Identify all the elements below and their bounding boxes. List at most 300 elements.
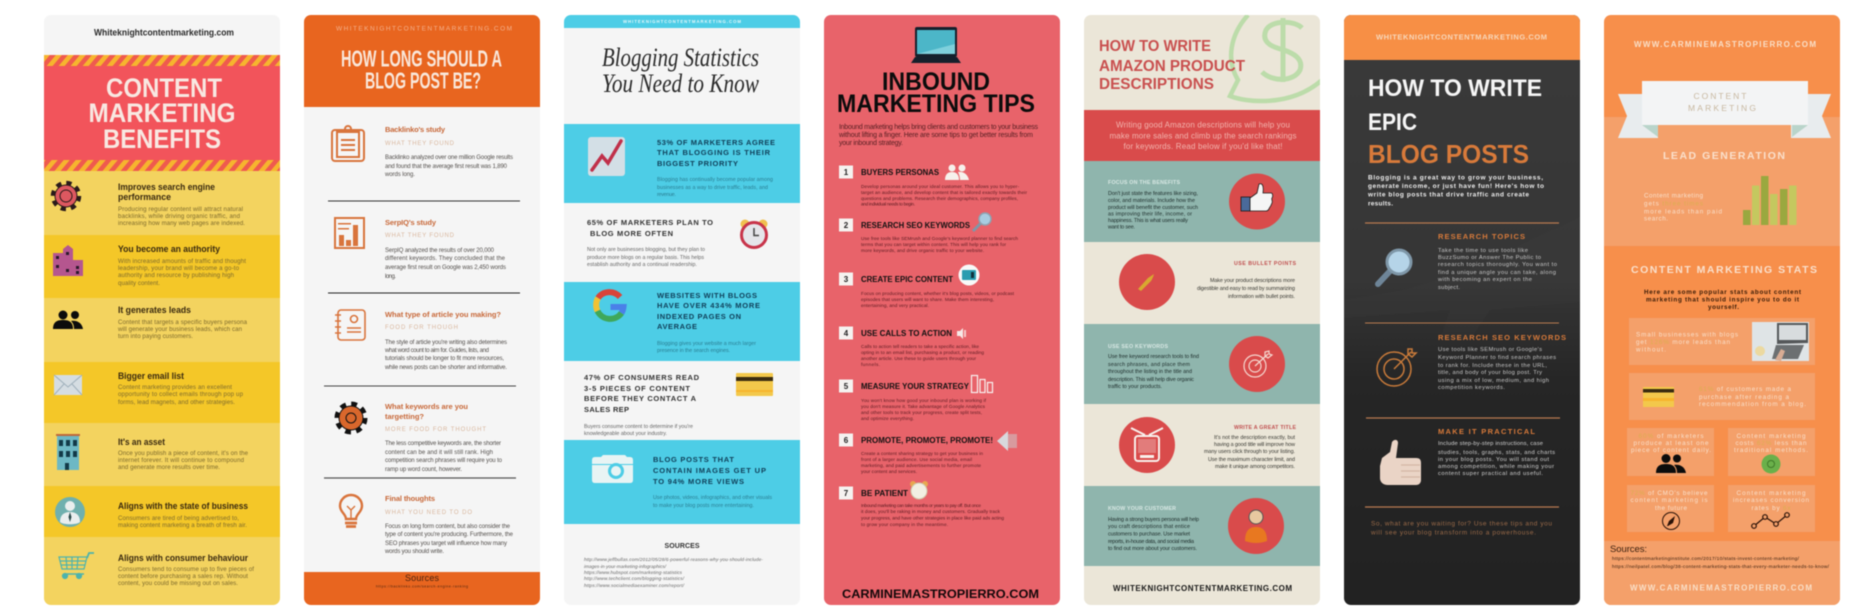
item: authority: quality content. bbox=[118, 280, 160, 287]
icon: bar chart bbox=[335, 218, 364, 248]
stat box: 60%: piece of content daily. bbox=[1631, 447, 1711, 454]
lead generation text: search. bbox=[1644, 216, 1668, 222]
section: bullet points: information with bullet points. bbox=[1228, 294, 1295, 300]
tip 5: and other tools to track your progress, create split tests, bbox=[861, 410, 982, 415]
section: research SEO keywords bbox=[1377, 333, 1566, 391]
intro bbox=[1367, 174, 1544, 208]
intro: without lifting a finger. Here are some tips to get better results from bbox=[838, 132, 1033, 139]
intro: Blogging is a great way to grow your business, bbox=[1368, 174, 1543, 182]
stat box: 126%: get 126% more leads than bbox=[1636, 339, 1730, 346]
stat: 47%: 3-5 PIECES OF CONTENT bbox=[584, 384, 690, 393]
intro: for keywords. Read below if you'd like that! bbox=[1124, 142, 1282, 151]
icon: megaphone bbox=[997, 431, 1017, 451]
icon: people bbox=[1656, 454, 1686, 473]
stat box: 61%: purchase after reading a bbox=[1699, 394, 1789, 401]
item: search performance: increasing how many web pages are indexed. bbox=[118, 220, 245, 227]
stat box: 126%: without. bbox=[1635, 346, 1666, 354]
item: state of business bbox=[55, 497, 248, 529]
study: Backlinko: Backlinko analyzed over one million Google results bbox=[385, 155, 513, 161]
study: SerpIQ: long. bbox=[385, 274, 396, 280]
tip 3: episodes that users will want to share. Make them interesting, bbox=[861, 297, 994, 302]
section: great title: WRITE A GREAT TITLE bbox=[1234, 425, 1296, 431]
item: asset: internet forever. It will continue to compound bbox=[118, 457, 244, 464]
keywords: The less competitive keywords are, the shorter bbox=[385, 441, 501, 447]
title: BLOG POSTS bbox=[1368, 139, 1529, 169]
section: know your customer: Having a strong buyers persona will help bbox=[1108, 517, 1199, 523]
section: focus on benefits: happiness. This is what users really bbox=[1108, 218, 1188, 224]
icon: target bbox=[1377, 349, 1416, 386]
section: SEO keywords: Use free keyword research tools to find bbox=[1108, 354, 1199, 360]
final thoughts: WHAT YOU NEED TO DO bbox=[385, 510, 472, 516]
stat box: 72% bbox=[1627, 485, 1714, 532]
study: Backlinko: Backlinko's study bbox=[385, 125, 446, 134]
tip 3: 3 bbox=[844, 275, 849, 284]
icon: envelope bbox=[54, 375, 82, 395]
tip 4: USE CALLS TO ACTION bbox=[861, 329, 952, 338]
section: make it practical: content super practical and useful. bbox=[1438, 471, 1543, 477]
stat: 53%: BIGGEST PRIORITY bbox=[657, 159, 738, 168]
panel: content marketing benefits bbox=[44, 15, 280, 605]
stats intro: Here are some popular stats about content bbox=[1644, 289, 1802, 296]
section: make it practical: in your blog posts. You will stand out bbox=[1438, 457, 1549, 463]
icon: bullet on red circle bbox=[1119, 254, 1175, 310]
section: research topics: RESEARCH TOPICS bbox=[1438, 232, 1525, 241]
section: research topics bbox=[1378, 232, 1557, 291]
item: authority: With increased amounts of traffic and thought bbox=[118, 258, 246, 265]
title: BLOG POST BE? bbox=[365, 68, 481, 94]
item: authority bbox=[53, 244, 246, 287]
tip 7: your progress, and have other strategies in place like paid ads acting bbox=[861, 516, 1004, 520]
icon: clipboard bbox=[332, 126, 364, 161]
section: focus on benefits: as improving their life, income, or bbox=[1108, 212, 1192, 218]
intro: write blog posts that drive traffic and create bbox=[1367, 192, 1529, 198]
section: bullet points bbox=[1119, 254, 1296, 310]
title: BENEFITS bbox=[103, 124, 221, 154]
item: email: Bigger email list bbox=[118, 371, 184, 381]
lead generation text bbox=[1644, 192, 1722, 222]
icon: TV on red circle bbox=[1119, 417, 1175, 473]
tip 1: target an audience, and develop content that is tailored exactly towards their bbox=[861, 190, 1027, 195]
tip 6: your content and services. bbox=[861, 469, 917, 474]
tip 5: you don't measure it. Take advantage of Google Analytics bbox=[861, 404, 986, 409]
keywords: competition search phrases will require you to bbox=[385, 458, 503, 464]
icon: people bbox=[945, 164, 969, 180]
section: SEO keywords: USE SEO KEYWORDS bbox=[1108, 344, 1168, 350]
intro: Inbound marketing helps bring clients and customers to your business bbox=[839, 124, 1038, 131]
item: consumer behaviour bbox=[59, 553, 254, 587]
icon: magnifier bbox=[1378, 250, 1411, 284]
title: DESCRIPTIONS bbox=[1099, 76, 1214, 93]
tip 3: entertaining, and very practical. bbox=[861, 303, 929, 308]
sources bbox=[376, 573, 468, 588]
stat: 53%: revenue. bbox=[657, 192, 676, 198]
tip 5: You won't know how good your inbound plan is working if bbox=[861, 398, 987, 403]
article type: FOOD FOR THOUGH bbox=[385, 325, 458, 331]
ribbon heading: MARKETING bbox=[1688, 103, 1756, 113]
section: bullet points: Make your product descriptions more bbox=[1210, 278, 1295, 284]
section: SEO keywords bbox=[1108, 336, 1285, 392]
tip 2: more keywords, and drive organic traffic to your website. bbox=[861, 248, 984, 253]
sources bbox=[1610, 544, 1830, 570]
bar chart bbox=[1743, 176, 1796, 225]
icon: camera bbox=[592, 455, 633, 483]
ribbon heading: CONTENT bbox=[1694, 91, 1746, 101]
tip 7: Inbound marketing can take months or years to pay off. But once bbox=[861, 503, 981, 508]
section: research topics: BuzzSumo or Answer The Public to bbox=[1438, 255, 1541, 261]
tip 6: 6 bbox=[844, 436, 849, 445]
final thoughts: type of content you're producing. Furthermore, the bbox=[385, 532, 514, 538]
keywords: content can be and it will still rank. High bbox=[385, 450, 493, 456]
stat: 434% bbox=[596, 291, 760, 354]
icon: gear bbox=[338, 404, 364, 432]
item: search performance: performance bbox=[118, 192, 171, 202]
stat: 47%: SALES REP bbox=[584, 405, 629, 414]
stat box: 72%: content marketing is bbox=[1630, 497, 1708, 504]
stat: 434%: Blogging gives your website a much larger bbox=[657, 341, 756, 347]
sources: images-in-your-marketing-infographics/ bbox=[584, 564, 667, 569]
section: know your customer: to find out more about your customers. bbox=[1108, 546, 1197, 552]
icon: laptop bbox=[911, 27, 961, 63]
stat: 47%: BEFORE THEY CONTACT A bbox=[584, 394, 697, 403]
tip 1: questions and problems. Research their demographics, company profiles, bbox=[861, 196, 1018, 201]
section: SEO keywords: throughout the listing in the title and bbox=[1108, 369, 1192, 375]
article type: what word count to aim for. Guides, lists, and bbox=[384, 348, 489, 354]
tip 1: Develop personas around your ideal customer. This allows you to hyper- bbox=[861, 184, 1019, 189]
item: consumer behaviour: content before purchasing a sales rep. Without bbox=[118, 573, 248, 580]
section: great title: It's not the description exactly, but bbox=[1214, 435, 1296, 441]
icon: dollar speech bubble bbox=[1230, 15, 1322, 101]
tip 4: funnels. bbox=[861, 362, 880, 367]
lead generation text: Content marketing bbox=[1644, 192, 1703, 200]
article type bbox=[335, 310, 507, 371]
section: make it practical: among competition, while making your bbox=[1438, 464, 1554, 470]
tip 1: 1 bbox=[844, 168, 849, 177]
tip 7: to grow your company in the meantime. bbox=[861, 522, 948, 527]
stat box: 62%: traditional methods. bbox=[1734, 447, 1808, 454]
stat: 65%: produce more blogs on a regular basis. This helps bbox=[587, 255, 704, 261]
item: asset: It's an asset bbox=[118, 437, 165, 447]
icon: thumbs up on red circle bbox=[1229, 174, 1285, 230]
title: EPIC bbox=[1368, 109, 1417, 136]
tip 2: 2 bbox=[844, 221, 849, 230]
sources: http://www.techclient.com/blogging-statistics/ bbox=[584, 576, 685, 581]
item: search performance: Producing regular content will attract natural bbox=[118, 206, 243, 213]
item: authority: You become an authority bbox=[118, 244, 220, 254]
tip 2 bbox=[839, 213, 1018, 253]
intro: make more sales and climb up the search rankings bbox=[1110, 132, 1296, 140]
stat: 434%: presence in the search engines. bbox=[657, 348, 730, 354]
stat box: 6x: Content marketing bbox=[1736, 490, 1806, 497]
stat box: 72%: the future bbox=[1655, 505, 1687, 512]
stat box: 72%: 72% of CMO's believe bbox=[1630, 490, 1708, 497]
icon: shopping cart bbox=[59, 553, 94, 578]
keywords: MORE FOOD FOR THOUGHT bbox=[385, 427, 486, 433]
stat: 94%: TO 94% MORE VIEWS bbox=[653, 477, 744, 486]
panel: inbound marketing tips bbox=[824, 15, 1060, 605]
icon: credit card bbox=[1643, 387, 1674, 407]
photo: laptop on desk bbox=[1752, 322, 1809, 361]
sources: https://neilpatel.com/blog/38-content-marketing-stats-that-every-marketer-needs-to-know/ bbox=[1612, 564, 1830, 570]
section: research SEO keywords: Keyword Planner to find search phrases bbox=[1438, 355, 1556, 361]
icon: buildings bbox=[53, 245, 83, 276]
title: HOW LONG SHOULD A bbox=[341, 46, 502, 72]
item: authority: leadership, your brand will become a go-to bbox=[118, 265, 240, 272]
tip 4: opting in to an email list, purchasing a product, or reading bbox=[861, 350, 984, 355]
lead generation text: more leads than paid bbox=[1644, 208, 1722, 216]
icon: rising chart bbox=[588, 137, 625, 176]
title: CONTENT bbox=[106, 73, 222, 103]
stat: 53%: THAT BLOGGING IS THEIR bbox=[657, 148, 771, 157]
item: search performance: backlinks, while driving organic traffic, and bbox=[118, 213, 240, 220]
section: know your customer bbox=[1108, 498, 1284, 554]
article type: What type of article you making? bbox=[385, 310, 501, 319]
icon: money bbox=[1762, 454, 1780, 474]
item: search performance bbox=[54, 182, 245, 227]
icon: screen badge bbox=[958, 264, 980, 286]
tip 2: RESEARCH SEO KEYWORDS bbox=[861, 221, 971, 230]
icon: thumbs up bbox=[1380, 440, 1421, 485]
icon: gear bbox=[54, 184, 78, 208]
section: research topics: Take the time to use tools like bbox=[1438, 248, 1528, 254]
item: leads: It generates leads bbox=[118, 305, 191, 315]
item: asset bbox=[56, 434, 249, 471]
item: email: forms, lead magnets, and other strategies. bbox=[118, 399, 235, 406]
study: SerpIQ: SerpIQ analyzed the results of over 20,000 bbox=[385, 248, 495, 254]
stat: 94%: BLOG POSTS THAT bbox=[653, 455, 734, 464]
item: consumer behaviour: content, you could be missing out on sales. bbox=[118, 580, 238, 587]
section: great title: make it unique among competitors. bbox=[1215, 464, 1295, 470]
study: SerpIQ: different keywords. They concluded that the bbox=[385, 256, 506, 262]
stats intro: marketing that should inspire you to do it bbox=[1646, 296, 1800, 304]
section: research SEO keywords: to rank for. Include these in the URL, bbox=[1438, 363, 1547, 369]
stat box: 126%: Small businesses with blogs bbox=[1636, 332, 1738, 338]
item: authority: authority and resource by publishing high bbox=[118, 272, 234, 279]
section: research SEO keywords: Use tools like SEMrush or Google's bbox=[1438, 347, 1542, 353]
study: Backlinko: and found that the average first result was 1,890 bbox=[385, 164, 508, 170]
stat: 434%: WEBSITES WITH BLOGS bbox=[657, 291, 757, 300]
section: focus on benefits: color, and materials. Include how the bbox=[1108, 198, 1195, 204]
stat box: 62%: Content marketing bbox=[1736, 433, 1806, 440]
section: focus on benefits bbox=[1107, 174, 1285, 230]
study: SerpIQ: average first result on Google was 2,450 words bbox=[385, 265, 506, 271]
section: great title: many users click through to your listing. bbox=[1204, 449, 1295, 455]
site name: Whiteknightcontentmarketing.com bbox=[94, 28, 234, 38]
study: SerpIQ bbox=[335, 218, 506, 280]
icon: light bulb bbox=[340, 495, 362, 526]
icon: Google G bbox=[596, 292, 624, 319]
tip 1 bbox=[839, 164, 1027, 206]
tip 4: another article. Use these to guide users through your bbox=[861, 356, 976, 361]
tip 5 bbox=[839, 376, 992, 421]
item: state of business: Consumers are tired of being advertised to, bbox=[118, 515, 239, 522]
heading: content marketing stats: CONTENT MARKETING STATS bbox=[1631, 264, 1817, 276]
icon: people bbox=[53, 310, 83, 329]
tip 1: BUYERS PERSONAS bbox=[861, 168, 940, 177]
tip 3 bbox=[839, 264, 1015, 308]
site name: WWW.CARMINEMASTROPIERRO.COM bbox=[1634, 40, 1816, 49]
item: asset: and generate more results over time. bbox=[118, 464, 220, 471]
keywords: What keywords are you bbox=[385, 402, 468, 411]
study: SerpIQ: WHAT THEY FOUND bbox=[385, 233, 455, 239]
final thoughts: Focus on long form content, but also consider the bbox=[385, 524, 511, 530]
title: HOW TO WRITE bbox=[1368, 75, 1542, 102]
section: bullet points: USE BULLET POINTS bbox=[1234, 261, 1296, 267]
site name: WHITEKNIGHTCONTENTMARKETING.COM bbox=[1376, 32, 1547, 42]
title bbox=[88, 73, 236, 154]
site name: WHITEKNIGHTCONTENTMARKETING.COM bbox=[623, 19, 741, 24]
tip 5: and optimize everything. bbox=[861, 416, 914, 421]
tip 4: 4 bbox=[844, 329, 849, 338]
stat: 65%: Not only are businesses blogging, but they plan to bbox=[587, 247, 705, 253]
study: SerpIQ: SerpIQ's study bbox=[385, 218, 437, 227]
section: research SEO keywords: RESEARCH SEO KEYWORDS bbox=[1438, 333, 1566, 342]
intro: results. bbox=[1368, 200, 1393, 208]
title: INBOUND bbox=[882, 68, 990, 96]
intro: generate income, or just have fun! Here's how to bbox=[1368, 183, 1544, 190]
article type: tutorials should be longer to fit more resources, bbox=[385, 356, 504, 362]
stat: 47%: Buyers consume content to determine if you're bbox=[584, 424, 693, 430]
section: great title bbox=[1119, 417, 1296, 473]
section: research SEO keywords: title, and body of your blog post. Try bbox=[1438, 370, 1542, 376]
icon: alarm clock bbox=[740, 220, 768, 248]
stat: 434%: INDEXED PAGES ON bbox=[657, 312, 741, 321]
title: AMAZON PRODUCT bbox=[1099, 58, 1245, 75]
footer site name: WHITEKNIGHTCONTENTMARKETING.COM bbox=[1113, 584, 1292, 593]
sources: https://contentmarketinginstitute.com/2017/10/stats-invest-content-marketing/ bbox=[1612, 556, 1800, 562]
final thoughts: SEO phrases you target will influence how many bbox=[385, 541, 507, 547]
item: state of business: Aligns with the state of business bbox=[118, 501, 248, 511]
stat: 53%: Blogging has continually become popular among bbox=[657, 177, 773, 183]
tip 5: 5 bbox=[844, 382, 849, 391]
stat: 47% bbox=[584, 373, 773, 437]
item: state of business: making content marketing a breath of fresh air. bbox=[118, 522, 247, 529]
sources: Sources: bbox=[1610, 544, 1647, 555]
sources: https://backlinko.com/search-engine-ranking bbox=[376, 584, 468, 588]
section: SEO keywords: search phrases, and place them bbox=[1108, 362, 1190, 368]
tip 7: it does, you'll be raking in money and customers. Gradually track bbox=[861, 509, 1001, 514]
stat: 65%: establish authority and a continual readership. bbox=[587, 262, 697, 268]
tip 3: CREATE EPIC CONTENT bbox=[861, 275, 953, 284]
section: make it practical bbox=[1380, 427, 1555, 485]
title: MARKETING TIPS bbox=[837, 90, 1035, 118]
section: make it practical: MAKE IT PRACTICAL bbox=[1438, 427, 1535, 436]
stat box: 60%: produce at least one bbox=[1634, 440, 1709, 447]
section: focus on benefits: FOCUS ON THE BENEFITS bbox=[1108, 180, 1180, 186]
item: leads: turn into paying customers. bbox=[118, 333, 193, 340]
final thoughts: Final thoughts bbox=[385, 494, 435, 503]
tip 3: Focus on producing content, whether it's blog posts, videos, or podcast bbox=[861, 291, 1015, 296]
section: research SEO keywords: using a mix of low, medium, and high bbox=[1438, 378, 1549, 384]
icon: line chart bbox=[1752, 513, 1789, 528]
final thoughts: words you should write. bbox=[384, 549, 444, 555]
item: email: opportunity to collect emails through pop up bbox=[118, 391, 244, 398]
lead generation text: gets three times bbox=[1644, 200, 1703, 208]
title: You Need to Know bbox=[602, 69, 760, 98]
panel: how to write Amazon product descriptions bbox=[1084, 15, 1322, 605]
heading: lead generation: LEAD GENERATION bbox=[1663, 150, 1785, 162]
final thoughts bbox=[340, 494, 514, 555]
stat: 53%: 53% OF MARKETERS AGREE bbox=[657, 138, 775, 147]
section: great title: having a good title will improve how bbox=[1214, 442, 1295, 448]
tip 5: MEASURE YOUR STRATEGY bbox=[861, 382, 970, 391]
icon: clock bbox=[910, 481, 928, 499]
sources: SOURCES bbox=[664, 543, 700, 550]
stat: 47%: knowledgeable about your industry. bbox=[584, 431, 667, 437]
stat box: 126% bbox=[1629, 318, 1815, 365]
tip 7 bbox=[839, 481, 1004, 527]
icon: customer on red circle bbox=[1228, 498, 1284, 554]
stat: 65%: 65% OF MARKETERS PLAN TO bbox=[587, 218, 713, 227]
keywords bbox=[338, 402, 503, 473]
panel: how to write epic blog posts bbox=[1344, 15, 1580, 605]
title: MARKETING bbox=[88, 98, 236, 128]
icon: rocket badge bbox=[1662, 512, 1680, 530]
intro bbox=[1110, 120, 1296, 151]
section: research topics: find a unique angle you can take, along bbox=[1438, 270, 1556, 276]
intro: Writing good Amazon descriptions will help you bbox=[1116, 120, 1290, 130]
stat: 434%: AVERAGE bbox=[657, 322, 697, 331]
stat: 434%: HAVE OVER 434% MORE bbox=[657, 301, 760, 310]
item: email bbox=[54, 371, 244, 406]
stat box: 60% bbox=[1627, 428, 1714, 476]
site name: WHITEKNIGHTCONTENTMARKETING.COM bbox=[336, 26, 512, 32]
section: bullet points: digestible and easy to read by summarizing bbox=[1197, 286, 1295, 292]
sources: http://www.jeffbullas.com/2012/05/28/6-powerful-reasons-why-you-should-include- bbox=[584, 557, 763, 562]
tip 6: PROMOTE, PROMOTE, PROMOTE! bbox=[861, 436, 993, 445]
sources bbox=[584, 543, 763, 588]
item: leads: will generate your business leads, which can bbox=[117, 326, 242, 333]
study: Backlinko: words long. bbox=[384, 172, 415, 178]
item: asset: Once you publish a piece of content, it's on the bbox=[118, 450, 249, 457]
ribbon heading bbox=[1618, 81, 1831, 138]
panel: content marketing stats bbox=[1604, 15, 1840, 605]
stat: 53% bbox=[588, 137, 775, 198]
closing text: So, what are you waiting for? Use these tips and you bbox=[1371, 520, 1552, 528]
study: Backlinko: WHAT THEY FOUND bbox=[385, 141, 455, 147]
stat box: 60%: 60% of marketers bbox=[1638, 433, 1704, 440]
stat: 53%: businesses as a way to drive traffic, leads, and bbox=[657, 185, 768, 191]
keywords: ramp up word count, however. bbox=[385, 467, 462, 473]
item: leads: Content that targets a specific buyers persona bbox=[118, 319, 248, 326]
stat box: 62%: costs 62% less than bbox=[1736, 440, 1807, 447]
section: know your customer: customers to purchase. Use market bbox=[1108, 532, 1190, 538]
stat: 94% bbox=[592, 455, 772, 509]
title bbox=[341, 46, 502, 94]
article type: The style of article you're writing also determines bbox=[385, 340, 507, 346]
tip 6 bbox=[839, 431, 1017, 474]
icon: magnifier bbox=[973, 213, 991, 231]
stat box: 61% bbox=[1629, 373, 1815, 420]
section: make it practical: Include step-by-step instructions, case bbox=[1438, 441, 1543, 447]
sources: Sources bbox=[405, 573, 440, 583]
item: email: Content marketing provides an excellent bbox=[118, 384, 232, 391]
tip 7: BE PATIENT bbox=[861, 489, 908, 498]
icon: speaker bbox=[957, 328, 965, 339]
section: research topics: with becoming an expert on the bbox=[1437, 277, 1532, 283]
icon: target on red circle bbox=[1229, 336, 1285, 392]
stat: 94%: to make your blog posts more entertaining. bbox=[653, 503, 754, 509]
article type: while news posts can be shorter and informative. bbox=[384, 365, 507, 371]
tip 2: Use free tools like SEMrush and Google's keyword planner to find search bbox=[861, 236, 1018, 241]
stat box: 6x bbox=[1728, 485, 1815, 532]
title bbox=[1368, 75, 1542, 169]
tip 6: marketing, and paid advertisements to further promote bbox=[861, 463, 981, 468]
section: know your customer: KNOW YOUR CUSTOMER bbox=[1108, 506, 1176, 512]
closing text bbox=[1370, 520, 1552, 536]
panel: how long should a blog post be bbox=[304, 15, 540, 605]
stat box: 6x: rates by 6x bbox=[1752, 505, 1791, 512]
tip 2: terms that you can target within content. This will help you rank for bbox=[861, 242, 1006, 247]
